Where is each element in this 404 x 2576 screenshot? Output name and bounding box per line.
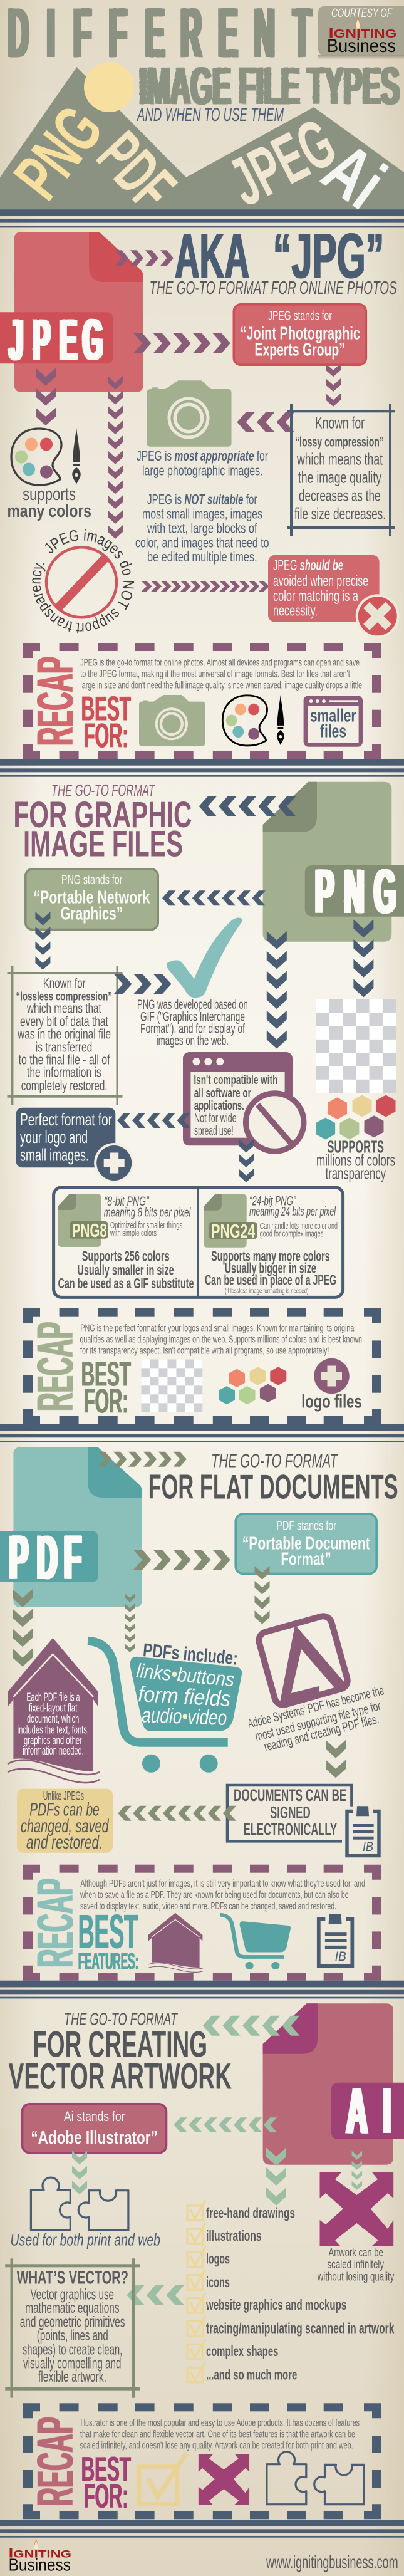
icon: cart with pdf features: PDFs include: xyxy=(142,1640,239,1669)
callout: lossless compression: Known for xyxy=(43,976,86,991)
callout: what's vector: mathematic equations xyxy=(25,2300,119,2317)
callout: ai stands for xyxy=(23,2104,167,2153)
callout: lossless compression: was in the original file xyxy=(17,1026,111,1042)
callout: what's vector: Vector graphics use xyxy=(30,2286,114,2303)
arrows: to changed box xyxy=(118,1806,236,1821)
heading: ai: FOR CREATING xyxy=(33,2025,207,2065)
recap: png: BEST xyxy=(81,1355,131,1394)
callout: not compatible window: applications. xyxy=(194,1099,244,1113)
panel: jpeg xyxy=(0,221,400,759)
arrows: png chevrons xyxy=(35,796,373,1049)
heading: ai: THE GO-TO FORMAT xyxy=(64,2010,178,2029)
callout: lossless compression: to the final file - all of xyxy=(19,1051,110,1067)
mountain label: png: PNG xyxy=(0,92,117,212)
icon: smaller files window: files xyxy=(320,722,346,742)
recap: pdf: RECAP xyxy=(27,1879,84,1968)
text: png history: Format"), and for display of xyxy=(140,1021,245,1036)
text: appropriate / not suitable: large photographic images. xyxy=(142,462,263,478)
column: png24: meaning 24 bits per pixel xyxy=(249,1205,336,1219)
callout: not compatible window: all software or xyxy=(194,1087,251,1100)
callout: signed electronically: ELECTRONICALLY xyxy=(244,1820,337,1838)
arrow: to check mark xyxy=(114,974,172,994)
icon: clipboard xyxy=(347,1806,379,1856)
heading: aka jpg xyxy=(175,221,384,292)
callout: what's vector: WHAT’S VECTOR? xyxy=(17,2268,128,2288)
callout: pdfs can be changed: Unlike JPEGs, xyxy=(43,1790,86,1803)
callout: lossy compression xyxy=(287,404,395,536)
callout: lossless compression: “lossless compression” xyxy=(16,991,112,1004)
column: png8: with simple colors xyxy=(110,1228,157,1238)
icon: house with pdf description: document, which xyxy=(27,1713,79,1725)
icon: cart with pdf features: form fields xyxy=(138,1682,231,1711)
text: supports many colors: many colors xyxy=(8,501,91,521)
callout: pdfs can be changed xyxy=(17,1789,113,1853)
icon: logo files plus xyxy=(301,1358,362,1412)
file icon: pdf: PDF xyxy=(9,1523,81,1593)
callout: lossless compression: which means that xyxy=(26,1001,101,1016)
recap: png: RECAP xyxy=(27,1322,84,1411)
callout: png stands for: PNG stands for xyxy=(61,873,123,887)
text: png history: images on the web. xyxy=(157,1033,229,1048)
icon: puzzle pieces xyxy=(31,2177,128,2230)
callout: pdfs can be changed: changed, saved xyxy=(21,1816,109,1837)
arrows: window chevrons xyxy=(117,1113,254,1182)
callout: should be avoided: JPEG should be xyxy=(273,557,343,574)
heading: png: FOR GRAPHIC xyxy=(13,795,192,835)
recap: ai xyxy=(23,2403,381,2519)
text: appropriate / not suitable: JPEG is most appropriate for xyxy=(137,448,268,464)
recap: jpeg: RECAP xyxy=(27,657,84,746)
column: png24: Supports many more colors xyxy=(211,1248,330,1264)
callout: lossless compression: completely restored. xyxy=(21,1078,108,1093)
file icon: png xyxy=(263,782,404,942)
callout: what's vector: shapes) to create clean, xyxy=(23,2341,122,2358)
mountains xyxy=(0,67,404,210)
checklist: ai uses: icons xyxy=(206,2274,230,2290)
callout: png stands for xyxy=(26,869,158,930)
callout: not compatible window xyxy=(183,1052,304,1151)
recap: png xyxy=(23,1308,381,1424)
divider xyxy=(0,759,404,777)
column: png8: “8-bit PNG” xyxy=(105,1194,149,1209)
callout: what's vector: and geometric primitives xyxy=(20,2313,125,2330)
file icon: jpeg: JPEG xyxy=(9,308,103,373)
checklist: ai uses: complex shapes xyxy=(206,2343,278,2359)
column: png8: Can be used as a GIF substitute xyxy=(58,1275,194,1291)
icon: house with pdf description xyxy=(8,1638,100,1783)
column: png8: PNG8 xyxy=(72,1219,107,1241)
recap: ai: FOR: xyxy=(84,2476,128,2515)
callout: perfect format: your logo and xyxy=(20,1127,88,1147)
icon: flame xyxy=(34,2540,38,2550)
checker: transparency xyxy=(316,999,396,1093)
callout: lossless compression xyxy=(8,966,123,1105)
callout: what's vector: (points, lines and xyxy=(37,2327,108,2344)
column: png24: “24-bit PNG” xyxy=(249,1194,296,1208)
icon: palette and brush xyxy=(11,428,81,485)
callout: jpeg stands for xyxy=(234,305,366,365)
column: png8: Usually smaller in size xyxy=(77,1261,174,1278)
callout: what's vector: flexible artwork. xyxy=(38,2369,106,2386)
recap: pdf: IB xyxy=(335,1949,346,1964)
sun xyxy=(84,62,134,112)
file icon: png: PNG xyxy=(315,857,396,927)
text: supports many colors: supports xyxy=(23,484,76,504)
recap: png: FOR: xyxy=(84,1382,128,1421)
heading: ai: VECTOR ARTWORK xyxy=(9,2056,232,2097)
callout: not compatible window: Not for wide xyxy=(194,1112,237,1125)
title: different image file types xyxy=(0,0,404,224)
panel: png8 vs png24 comparison xyxy=(54,1187,343,1298)
icon: scale arrows xyxy=(319,2172,393,2246)
column: png24: Usually bigger in size xyxy=(225,1260,316,1276)
callout: not compatible window: Isn't compatible with xyxy=(194,1073,277,1087)
icon: check mark xyxy=(167,917,242,998)
file icon: pdf xyxy=(0,1447,142,1607)
icon: house with pdf description: Each PDF file is a xyxy=(26,1691,80,1703)
callout: lossless compression: is transferred xyxy=(36,1039,92,1055)
recap: pdf: FEATURES: xyxy=(78,1948,138,1974)
column: png24: PNG24 xyxy=(211,1220,256,1242)
icon: flame xyxy=(356,18,360,29)
callout: pdfs can be changed: PDFs can be xyxy=(29,1800,100,1820)
icon: clipboard: IB xyxy=(363,1840,373,1854)
callout: ai stands for: “Adobe Illustrator” xyxy=(31,2128,158,2148)
callout: signed electronically: SIGNED xyxy=(270,1803,311,1822)
courtesy badge: Business xyxy=(327,36,396,56)
text: appropriate / not suitable: JPEG is NOT suitable for xyxy=(147,491,257,507)
divider xyxy=(0,2520,404,2538)
footer logo: IGNITING xyxy=(9,2547,71,2561)
icon: house with pdf description: information needed. xyxy=(23,1744,84,1757)
column: png8: Optimized for smaller things xyxy=(110,1220,182,1231)
mountain label: pdf: PDF xyxy=(83,118,189,224)
panel: pdf xyxy=(0,1447,398,1981)
callout: jpeg stands for: JPEG stands for xyxy=(268,310,332,323)
column: png24: Can handle lots more color and xyxy=(260,1221,338,1231)
heading: ai xyxy=(9,2010,232,2097)
icon: house with pdf description: graphics and other xyxy=(24,1734,82,1746)
callout: pdf stands for: Format” xyxy=(281,1550,331,1570)
column: png24: good for complex images xyxy=(260,1228,323,1239)
text: png history: PNG was developed based on xyxy=(137,998,248,1012)
icon: cart with pdf features: audio•video xyxy=(142,1703,227,1730)
text: appropriate / not suitable: color, and images that need to xyxy=(135,534,269,550)
callout: signed electronically xyxy=(227,1785,379,1856)
icon: cart with pdf features: links•buttons xyxy=(135,1659,236,1691)
checklist: ai uses: logos xyxy=(206,2251,230,2267)
panel: ai xyxy=(5,2003,404,2519)
icon: smaller files window: smaller xyxy=(310,706,356,726)
file icon: ai: AI xyxy=(346,2075,391,2147)
text: appropriate / not suitable xyxy=(135,448,269,565)
heading: aka jpg: AKA xyxy=(175,221,249,292)
arrows: jpeg chevrons xyxy=(36,250,341,592)
text: appropriate / not suitable: with text, large blocks of xyxy=(147,520,257,536)
footer logo: Business xyxy=(9,2555,71,2575)
checklist: ai uses: free-hand drawings xyxy=(206,2204,295,2221)
recap: pdf xyxy=(23,1865,381,1981)
icon: prohibition sign xyxy=(246,1093,304,1151)
icon: plus circle xyxy=(94,1143,134,1183)
icon: cart with pdf features xyxy=(88,1640,242,1773)
text: png history: GIF ("Graphics Interchange xyxy=(140,1009,245,1024)
icon: large check box xyxy=(139,2453,187,2504)
checklist: ai uses: ...and so much more xyxy=(206,2367,297,2383)
text: supports many colors xyxy=(8,484,91,521)
heading: png: THE GO-TO FORMAT xyxy=(51,781,155,800)
courtesy badge xyxy=(318,6,404,60)
callout: should be avoided: color matching is a xyxy=(273,588,358,605)
callout: perfect format xyxy=(16,1108,134,1183)
callout: lossy compression: Known for xyxy=(315,413,365,432)
text: appropriate / not suitable: be edited multiple times. xyxy=(147,549,257,565)
icon: logo files plus: logo files xyxy=(301,1392,362,1412)
column: png8: meaning 8 bits per pixel xyxy=(104,1206,191,1220)
icon: x circle xyxy=(355,594,400,639)
heading: pdf: THE GO-TO FORMAT xyxy=(211,1450,338,1472)
text: png history xyxy=(137,998,248,1048)
callout: should be avoided: necessity. xyxy=(273,603,318,620)
callout: lossless compression: the information is xyxy=(27,1065,101,1080)
recap: jpeg: BEST xyxy=(81,689,131,727)
callout: png stands for: Graphics” xyxy=(61,904,123,924)
recap: ai: RECAP xyxy=(27,2417,84,2506)
column: png24 xyxy=(204,1194,338,1295)
recap: ai: BEST xyxy=(81,2449,131,2488)
courtesy badge: IGNITING xyxy=(328,25,397,41)
text: print and web: Used for both print and web xyxy=(10,2230,160,2249)
column: png24: (If lossless image formatting is needed) xyxy=(225,1287,308,1295)
callout: perfect format: Perfect format for xyxy=(20,1110,112,1129)
arrows: ai chevrons xyxy=(72,2016,362,2305)
callout: perfect format: small images. xyxy=(20,1145,89,1164)
icon: color hexagons xyxy=(316,1095,396,1139)
icon: no transparency: JPEG images do NOT support transparency. xyxy=(32,529,134,633)
recap: jpeg xyxy=(23,643,381,759)
icon: smaller files window xyxy=(304,696,363,747)
divider xyxy=(0,1424,404,1442)
checklist: ai uses xyxy=(187,2200,395,2383)
callout: pdf stands for xyxy=(236,1514,376,1574)
recap: jpeg: FOR: xyxy=(84,716,128,754)
callout: what's vector: visually compelling and xyxy=(23,2355,121,2372)
heading: pdf xyxy=(148,1450,398,1506)
callout: jpeg stands for: Experts Group” xyxy=(254,340,345,360)
icon: house with pdf description: fixed-layout flat xyxy=(29,1702,77,1714)
heading: png: IMAGE FILES xyxy=(23,824,183,865)
recap: pdf: BEST xyxy=(78,1905,138,1959)
callout: should be avoided xyxy=(268,555,400,639)
divider xyxy=(0,209,404,227)
subtitle: AND WHEN TO USE THEM xyxy=(137,105,284,125)
arrows: pdf chevrons xyxy=(13,1452,346,1778)
heading: png xyxy=(13,781,192,865)
callout: pdfs can be changed: and restored. xyxy=(26,1832,103,1853)
footer logo xyxy=(9,2540,71,2575)
file icon: ai xyxy=(263,2003,404,2165)
callout: what's vector xyxy=(5,2258,140,2398)
text: supports millions of colors xyxy=(316,1137,395,1183)
icon: camera xyxy=(147,380,232,447)
callout: pdf stands for: PDF stands for xyxy=(276,1520,336,1533)
callout: lossless compression: every bit of data that xyxy=(20,1013,108,1029)
column: png8: Supports 256 colors xyxy=(82,1248,170,1264)
checklist: ai uses: illustrations xyxy=(206,2228,262,2244)
panel: png xyxy=(8,781,404,1424)
icon: adobe logo xyxy=(257,1614,350,1707)
callout: not compatible window: spread use! xyxy=(194,1124,234,1138)
callout: ai stands for: Ai stands for xyxy=(64,2109,125,2124)
divider xyxy=(0,1981,404,1998)
column: png8 xyxy=(58,1194,194,1291)
text: artwork scaling xyxy=(317,2246,395,2283)
text: appropriate / not suitable: most small images, images xyxy=(142,506,262,521)
callout: png stands for: “Portable Network xyxy=(34,888,150,908)
file icon: jpeg xyxy=(0,232,143,392)
icon: house with pdf description: includes the text, fonts, xyxy=(18,1724,89,1736)
